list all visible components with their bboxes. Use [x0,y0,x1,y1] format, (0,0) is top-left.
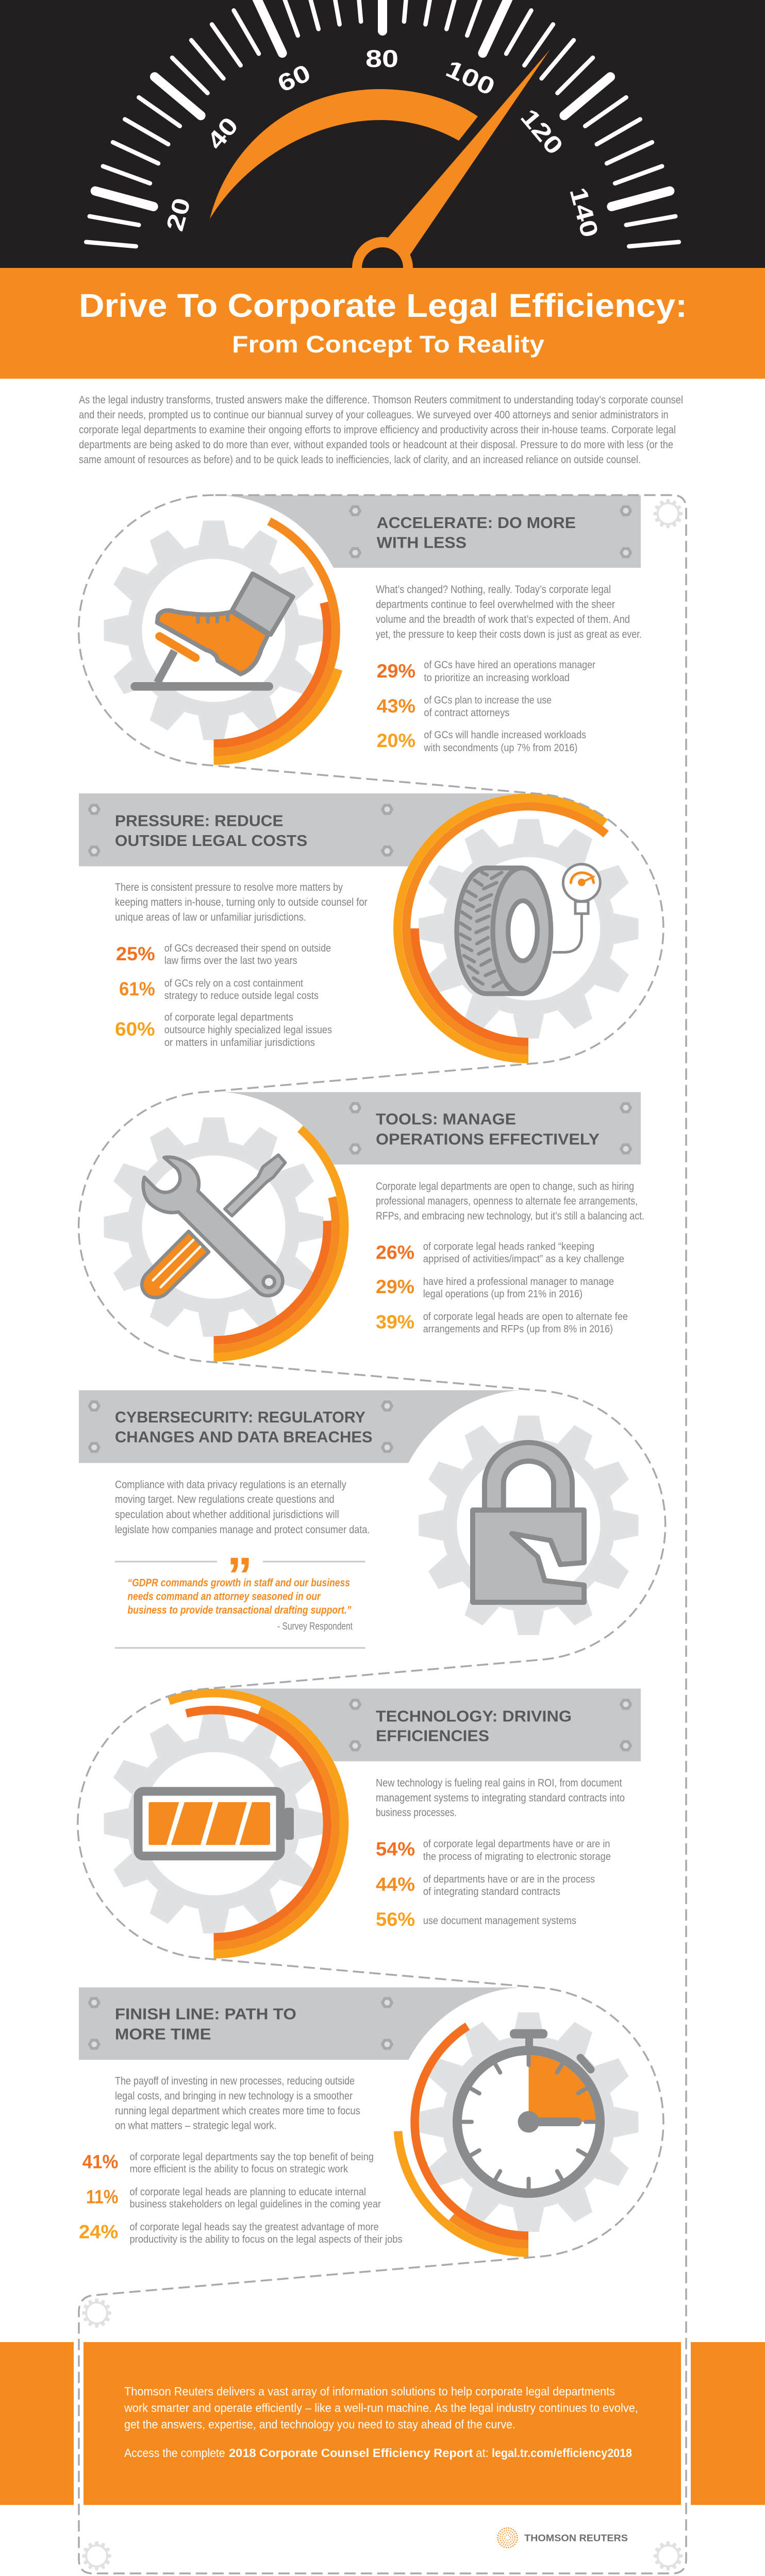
stat: 61% [119,978,319,1002]
stat: 44%: of integrating standard contracts [423,1886,560,1897]
body text: business processes. [376,1807,457,1819]
stat: 11% [86,2187,381,2210]
icon: dotted globe [498,2528,518,2548]
report call to action: Access the complete [124,2446,225,2460]
speedometer numbers [161,45,604,240]
report call to action: at: [476,2446,489,2460]
body text [376,1180,644,1222]
stat: 43% [377,694,552,719]
stat: 26%: 26% [376,1242,414,1263]
panel: tools [104,1102,644,1357]
banner [348,505,632,558]
body text [115,882,368,923]
footer orange band [0,2342,765,2505]
footer text: Thomson Reuters delivers a vast array of information solutions to help corporate legal departments [124,2384,615,2398]
body text: departments continue to feel overwhelmed with the sheer [376,599,615,611]
speedometer numbers: 60 [273,59,314,97]
footer text: work smarter and operate efficiently – like a well-run machine. As the legal industry continues to evolve, [124,2401,638,2415]
body text [115,1479,370,1536]
stat: 25% [116,943,331,967]
stat: 26%: of corporate legal heads ranked “keeping [423,1241,594,1252]
stat: 56% [376,1909,576,1930]
stat: 41%: more efficient is the ability to focus on strategic work [130,2164,348,2175]
panel: finish line [79,1997,638,2252]
heading [115,812,307,850]
speedometer needle [352,49,550,268]
stat: 60%: 60% [115,1019,155,1040]
stat: 29% [376,1276,614,1300]
stat: 39% [376,1311,628,1335]
icon: boot on pedal [135,573,293,686]
progress arcs [213,1129,344,1357]
body text [376,1777,625,1819]
speedometer numbers: 100 [442,55,499,100]
icon: stopwatch [457,2029,600,2193]
gear [419,1416,638,1635]
speedometer numbers: 140 [564,184,604,240]
body text: yet, the pressure to keep their costs down is just as great as ever. [376,629,642,640]
intro paragraph: departments are being asked to do more than ever, without expanded tools or headcount at their disposal. Pressure to do more with less (or the [79,439,673,451]
stat: 60%: outsource highly specialized legal issues [164,1025,332,1036]
main title: Drive To Corporate Legal Efficiency: [79,287,687,324]
body text: keeping matters in-house, turning only to outside counsel for [115,896,368,908]
stat: 24%: of corporate legal heads say the greatest advantage of more [130,2222,379,2233]
gear [419,2012,638,2232]
stat: 26% [376,1241,624,1265]
heading [377,514,576,552]
intro paragraph: As the legal industry transforms, trusted answers make the difference. Thomson Reuters commitment to understanding today’s corporate counsel [79,394,683,406]
stat: 29%: to prioritize an increasing workload [424,672,570,684]
intro paragraph: and their needs, prompted us to continue our biannual survey of your colleagues. We surveyed over 400 attorneys and senior administrators in [79,409,669,421]
body text: moving target. New regulations create questions and [115,1494,335,1505]
body text [376,584,642,640]
body text [115,2075,360,2131]
icon: broken padlock [473,1443,584,1602]
progress arcs [169,1693,344,1954]
speedometer orange arc [210,89,478,219]
stat: 39%: arrangements and RFPs (up from 8% in 2016) [423,1324,613,1335]
stat: 29% [377,659,595,684]
icon: battery [138,1791,294,1856]
body text: RFPs, and embracing new technology, but it’s still a balancing act. [376,1210,644,1222]
footer text: get the answers, expertise, and technology you need to stay ahead of the curve. [124,2417,515,2431]
stat: 24% [79,2222,403,2245]
speedometer tick marks [86,0,679,246]
heading [115,1408,372,1446]
heading: CYBERSECURITY: REGULATORY [115,1408,365,1426]
body text: management systems to integrating standard contracts into [376,1792,625,1804]
stat: 54% [376,1839,611,1862]
stat: 43%: of contract attorneys [424,707,509,719]
heading [115,2005,296,2043]
icon: wrench and screwdriver [142,1155,285,1298]
intro paragraph: corporate legal departments to examine their ongoing efforts to improve efficiency and productivity across their in-house teams. Corporate legal [79,424,676,436]
gear [104,520,324,740]
speedometer numbers: 120 [515,104,569,160]
quote text [127,1577,352,1616]
stat: 39%: of corporate legal heads are open to alternate fee [423,1311,628,1323]
heading: OPERATIONS EFFECTIVELY [376,1130,600,1148]
header: speedometer [0,0,765,268]
heading [376,1110,600,1148]
stat: 54%: the process of migrating to electronic storage [423,1851,611,1862]
title banner [0,268,765,379]
stat: 43%: of GCs plan to increase the use [424,694,552,706]
stat: 61%: 61% [119,978,155,999]
stat: 20%: of GCs will handle increased workloads [424,730,586,741]
gear [104,1714,324,1934]
progress arcs [213,521,338,760]
stat: 11%: business stakeholders on legal guidelines in the coming year [130,2199,381,2210]
panel: accelerate [104,505,642,760]
body text: on what matters – strategic legal work. [115,2120,276,2131]
stat: 43%: 43% [377,696,415,717]
stat: 11%: of corporate legal heads are planning to educate internal [130,2187,366,2198]
stat: 54%: 54% [376,1839,415,1860]
body text: professional managers, openness to alternate fee arrangements, [376,1195,638,1207]
icon: quote mark: ” [227,1547,253,1605]
heading: FINISH LINE: PATH TO [115,2005,296,2023]
panel: pressure [88,798,638,1059]
body text: speculation about whether additional jurisdictions will [115,1509,339,1521]
stat: 24%: 24% [79,2222,118,2243]
report call to action [124,2446,632,2460]
quote text: “GDPR commands growth in staff and our business [127,1577,350,1589]
banner [88,1400,393,1453]
stat: 54%: of corporate legal departments have or are in [423,1839,610,1850]
stat: 24%: productivity is the ability to focus on the legal aspects of their jobs [130,2234,403,2245]
gear [104,1117,324,1337]
wordmark: THOMSON REUTERS [524,2533,628,2543]
body text: Compliance with data privacy regulations is an eternally [115,1479,346,1491]
heading: WITH LESS [377,534,467,552]
heading: TOOLS: MANAGE [376,1110,516,1128]
quote attribution: - Survey Respondent [277,1621,353,1632]
stat: 11%: 11% [86,2187,118,2208]
speedometer numbers: 20 [161,195,195,234]
heading: TECHNOLOGY: DRIVING [376,1707,572,1725]
body text: New technology is fueling real gains in ROI, from document [376,1777,622,1789]
small corner gears [82,499,683,2570]
banner [348,1699,632,1751]
stat: 39%: 39% [376,1312,414,1332]
stat: 29%: have hired a professional manager to manage [423,1276,614,1287]
stat: 61%: strategy to reduce outside legal costs [164,990,319,1002]
heading: MORE TIME [115,2025,211,2043]
report call to action: 2018 Corporate Counsel Efficiency Report [229,2446,473,2460]
stat: 25%: law firms over the last two years [164,955,297,967]
stat: 20%: 20% [377,730,415,751]
speedometer numbers: 80 [365,45,398,72]
progress arcs [398,2026,528,2252]
subtitle: From Concept To Reality [232,331,544,358]
callout: survey quote [115,1547,365,1648]
body text: unique areas of law or unfamiliar jurisdictions. [115,911,306,923]
banner [348,1102,632,1155]
stat: 41%: of corporate legal departments say the top benefit of being [130,2151,374,2163]
stat: 29%: of GCs have hired an operations manager [424,659,595,671]
banner backgrounds [79,496,641,2060]
stat: 61%: of GCs rely on a cost containment [164,978,303,989]
stat: 60%: or matters in unfamiliar jurisdictions [164,1037,315,1048]
stat: 60%: of corporate legal departments [164,1012,293,1023]
progress arcs [397,798,606,1059]
body text: volume and the breadth of work that’s expected of them. And [376,614,630,625]
intro paragraph: same amount of resources as before) and to be quick leads to inefficiencies, lack of clarity, and an increased reliance on outside counsel. [79,454,641,466]
stat: 25%: 25% [116,943,155,964]
stat: 26%: apprised of activities/impact” as a key challenge [423,1253,624,1265]
stat: 29%: legal operations (up from 21% in 2016) [423,1289,583,1300]
stat: 44%: 44% [376,1874,415,1895]
body text: Corporate legal departments are open to change, such as hiring [376,1180,634,1192]
white wheel discs [78,495,663,2257]
stat: 44%: of departments have or are in the process [423,1874,595,1885]
body text: What’s changed? Nothing, really. Today’s corporate legal [376,584,611,596]
logo: Thomson Reuters [498,2528,628,2548]
intro paragraph [79,394,683,466]
body text: running legal department which creates more time to focus [115,2105,360,2117]
dashed conveyor belt [78,495,686,2573]
icon: tire with pressure gauge [457,864,600,994]
quote text: business to provide transactional drafting support.” [127,1604,352,1616]
stat: 56%: 56% [376,1909,415,1930]
heading: PRESSURE: REDUCE [115,812,284,830]
heading: ACCELERATE: DO MORE [377,514,576,532]
banner [88,1997,393,2050]
footer text [124,2384,638,2460]
banner [88,804,393,856]
stat: 20% [377,730,586,754]
panel: cybersecurity [88,1400,638,1648]
stat: 29%: 29% [377,660,415,682]
body text: There is consistent pressure to resolve more matters by [115,882,343,893]
speedometer numbers: 40 [202,112,243,155]
report call to action: legal.tr.com/efficiency2018 [492,2446,632,2460]
stat: 56%: use document management systems [423,1916,576,1927]
stat: 44% [376,1874,595,1897]
heading: EFFICIENCIES [376,1727,489,1745]
stat: 20%: with secondments (up 7% from 2016) [424,742,577,754]
heading: CHANGES AND DATA BREACHES [115,1428,372,1446]
body text: legal costs, and bringing in new technology is a smoother [115,2090,353,2102]
stat: 29%: 29% [376,1276,414,1297]
body text: legislate how companies manage and protect consumer data. [115,1524,370,1536]
panel: technology [104,1693,632,1954]
heading [376,1707,572,1745]
gear [419,819,638,1039]
quote text: needs command an attorney seasoned in our [127,1591,321,1603]
heading: OUTSIDE LEGAL COSTS [115,832,307,850]
stat: 41%: 41% [82,2151,118,2173]
body text: The payoff of investing in new processes, reducing outside [115,2075,355,2087]
stat: 41% [82,2151,374,2175]
stat: 60% [115,1012,332,1048]
stat: 25%: of GCs decreased their spend on outside [164,943,331,954]
